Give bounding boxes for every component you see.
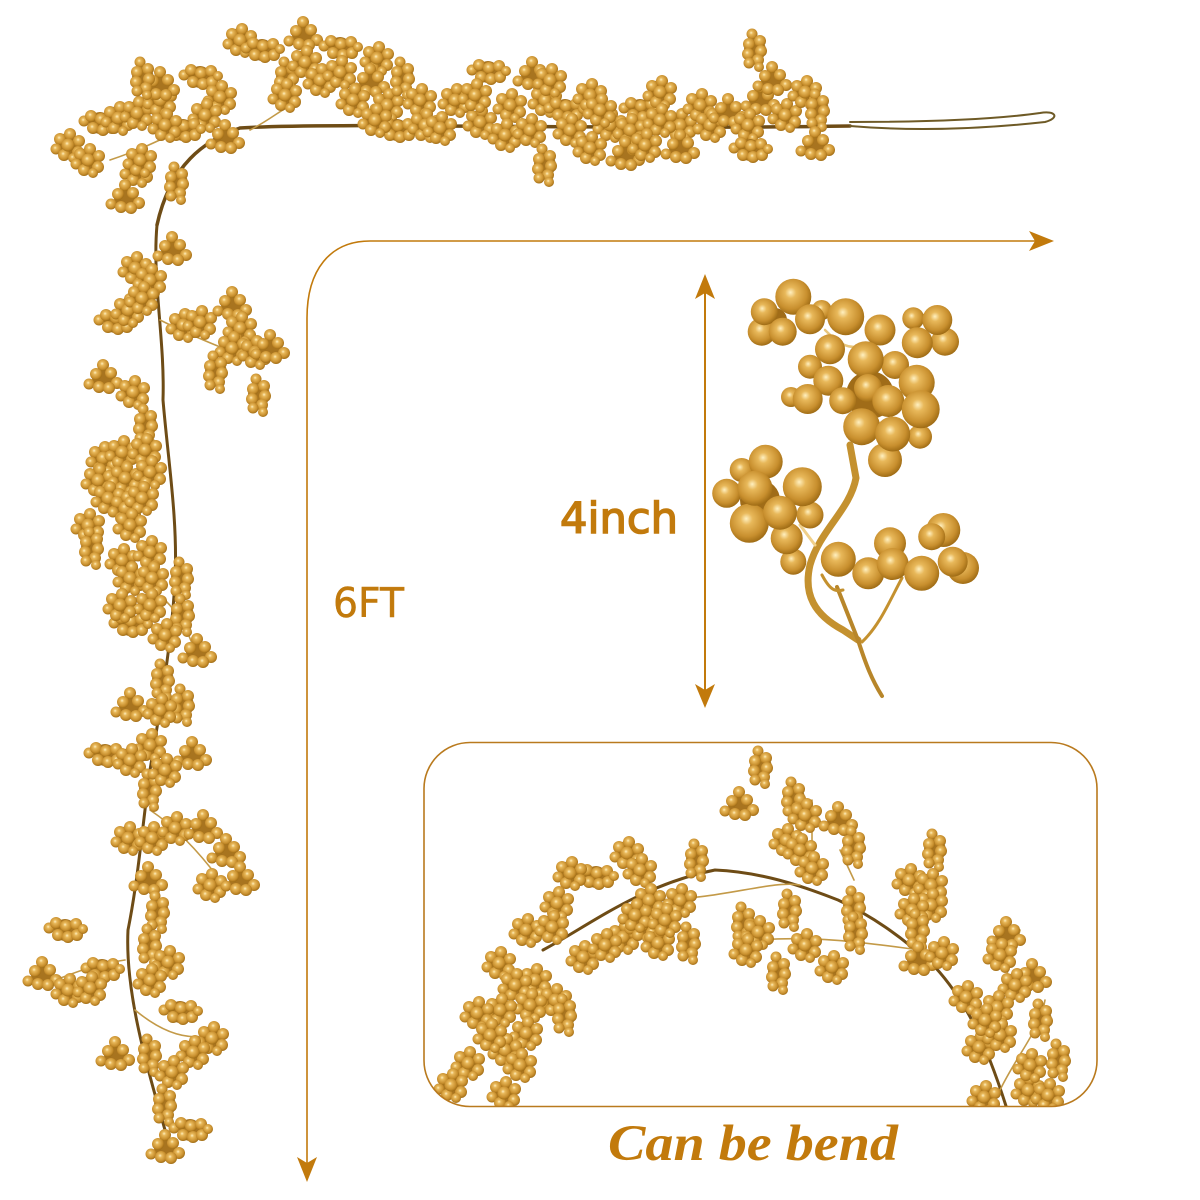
close-up berry sprig <box>712 279 979 696</box>
vertical hanging berry clusters <box>22 231 290 1164</box>
arch berries clipped to frame <box>434 746 1071 1115</box>
label: 6FT: 6FT <box>333 579 405 627</box>
panel: bendable garland arch in rounded frame <box>424 742 1097 1115</box>
label: 4inch: 4inch <box>560 494 678 544</box>
upper-left berry clusters <box>50 56 245 214</box>
garland stems and wire loop <box>55 85 1054 1130</box>
caption: Can be bend: Can be bend <box>608 1116 900 1172</box>
arch stems <box>543 800 1045 1106</box>
top horizontal berry clusters <box>222 16 835 187</box>
sprig berries <box>712 279 979 591</box>
rounded frame <box>424 742 1097 1106</box>
6FT dimension arrow: corner line with two heads <box>297 231 1054 1182</box>
sprig stems <box>800 330 902 696</box>
4inch dimension arrow <box>695 274 715 708</box>
